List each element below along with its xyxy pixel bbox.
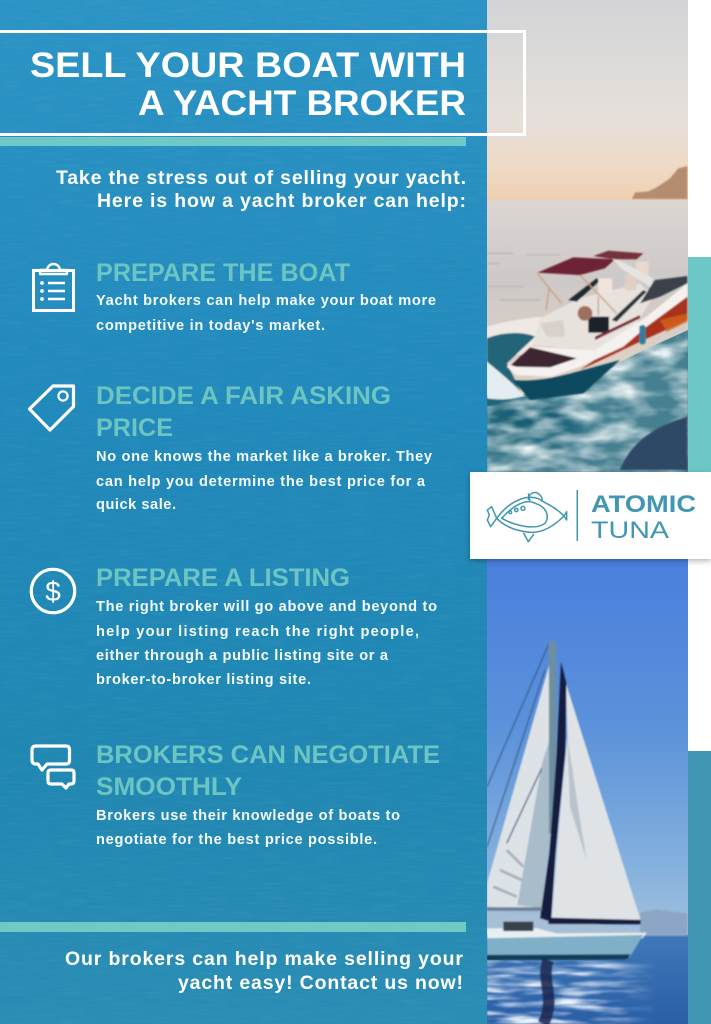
body text bbox=[96, 599, 437, 688]
body text: either through a public listing site or a bbox=[96, 648, 389, 664]
logo card bbox=[470, 472, 711, 559]
title frame bbox=[0, 32, 524, 134]
bottom accent bar bbox=[0, 922, 466, 932]
wordmark: TUNA bbox=[591, 517, 669, 544]
icon: chat bubbles bbox=[32, 746, 74, 788]
heading: PRICE bbox=[96, 414, 173, 442]
photo: motorboat at sunset bbox=[487, 0, 688, 472]
section: prepare a listing bbox=[31, 564, 437, 688]
body text: Brokers use their knowledge of boats to bbox=[96, 808, 400, 824]
heading: PREPARE A LISTING bbox=[96, 564, 350, 592]
section: decide a fair asking price bbox=[30, 382, 433, 513]
body text: help your listing reach the right people, bbox=[96, 624, 419, 640]
top accent bar bbox=[0, 137, 466, 146]
body text: quick sale. bbox=[96, 497, 176, 513]
heading: PREPARE THE BOAT bbox=[96, 259, 350, 287]
right side colour strip bbox=[688, 0, 711, 1024]
heading bbox=[96, 741, 440, 801]
call to action bbox=[65, 948, 463, 994]
intro text bbox=[56, 167, 466, 212]
wordmark: ATOMIC bbox=[591, 491, 696, 518]
body text bbox=[96, 293, 436, 334]
icon: clipboard bbox=[34, 264, 74, 310]
body text: broker-to-broker listing site. bbox=[96, 672, 311, 688]
intro text: Take the stress out of selling your yacht. bbox=[56, 167, 466, 189]
title: A YACHT BROKER bbox=[138, 84, 466, 123]
heading: BROKERS CAN NEGOTIATE bbox=[96, 741, 440, 769]
icon: price tag bbox=[30, 386, 74, 430]
call to action: Our brokers can help make selling your bbox=[65, 948, 463, 970]
body text: No one knows the market like a broker. They bbox=[96, 449, 433, 465]
divider bbox=[576, 490, 578, 541]
heading: DECIDE A FAIR ASKING bbox=[96, 382, 391, 410]
body text: negotiate for the best price possible. bbox=[96, 832, 377, 848]
intro text: Here is how a yacht broker can help: bbox=[97, 190, 466, 212]
title: SELL YOUR BOAT WITH bbox=[30, 46, 466, 85]
body text: competitive in today's market. bbox=[96, 318, 325, 334]
water background panel bbox=[0, 0, 487, 1024]
body text bbox=[96, 449, 433, 513]
heading: SMOOTHLY bbox=[96, 773, 242, 801]
call to action: yacht easy! Contact us now! bbox=[178, 972, 463, 994]
wake water bbox=[487, 330, 688, 472]
icon: fish submarine bbox=[487, 493, 567, 542]
section: prepare the boat bbox=[34, 259, 436, 334]
body text bbox=[96, 808, 400, 848]
icon: dollar coin bbox=[31, 569, 75, 613]
body text: can help you determine the best price for a bbox=[96, 474, 426, 490]
icon: dollar coin: $ bbox=[45, 576, 61, 607]
body text: The right broker will go above and beyond to bbox=[96, 599, 437, 615]
section: brokers can negotiate smoothly bbox=[32, 741, 440, 848]
body text: Yacht brokers can help make your boat more bbox=[96, 293, 436, 309]
photo: sailboat bbox=[487, 559, 688, 1024]
title bbox=[30, 46, 466, 123]
wordmark bbox=[591, 491, 696, 544]
heading bbox=[96, 382, 391, 442]
